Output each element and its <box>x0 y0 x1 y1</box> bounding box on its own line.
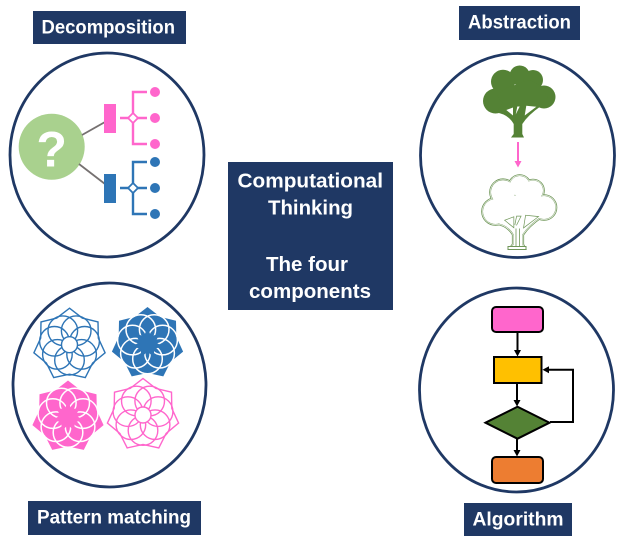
arrow: abstraction <box>514 142 522 168</box>
icon: pink outline rosette <box>107 378 179 448</box>
heading: Algorithm <box>464 503 572 536</box>
icon: pink filled rosette <box>32 380 104 450</box>
pink hierarchy <box>104 87 160 149</box>
flowchart end box <box>492 457 543 483</box>
flowchart arrows <box>514 332 573 456</box>
heading: Abstraction: Abstraction <box>468 12 571 34</box>
circle outline: abstraction <box>420 54 614 258</box>
title box: Computational Thinking: components <box>249 281 371 303</box>
panel: abstraction <box>420 6 614 258</box>
icon: filled tree <box>483 66 556 138</box>
icon: outline tree <box>483 176 556 250</box>
icon: question mark <box>19 114 85 180</box>
icon: blue outline rosette <box>34 308 105 378</box>
circle outline: decomposition <box>10 53 204 257</box>
title box: Computational Thinking: Thinking <box>268 198 353 220</box>
icon: question mark: ? <box>36 122 67 178</box>
heading: Decomposition <box>33 11 186 44</box>
title box: Computational Thinking: Computational <box>238 170 383 192</box>
flowchart <box>486 307 573 483</box>
title box: Computational Thinking <box>228 162 393 310</box>
heading: Decomposition: Decomposition <box>42 18 175 38</box>
panel: algorithm <box>420 288 614 536</box>
flowchart start box <box>492 307 543 332</box>
panel: decomposition <box>10 11 204 257</box>
heading: Pattern matching: Pattern matching <box>37 508 191 528</box>
circle outline: pattern matching <box>13 283 206 487</box>
connector lines <box>79 122 105 184</box>
blue hierarchy <box>104 157 160 219</box>
title box: Computational Thinking: The four <box>266 254 348 276</box>
circle outline: algorithm <box>420 288 614 492</box>
heading: Abstraction <box>459 6 580 40</box>
icon: blue filled rosette <box>112 307 183 376</box>
panel: pattern matching <box>13 283 206 535</box>
heading: Algorithm: Algorithm <box>472 510 564 530</box>
flowchart process box <box>494 357 542 383</box>
flowchart decision diamond <box>486 407 550 439</box>
heading: Pattern matching <box>28 501 201 535</box>
